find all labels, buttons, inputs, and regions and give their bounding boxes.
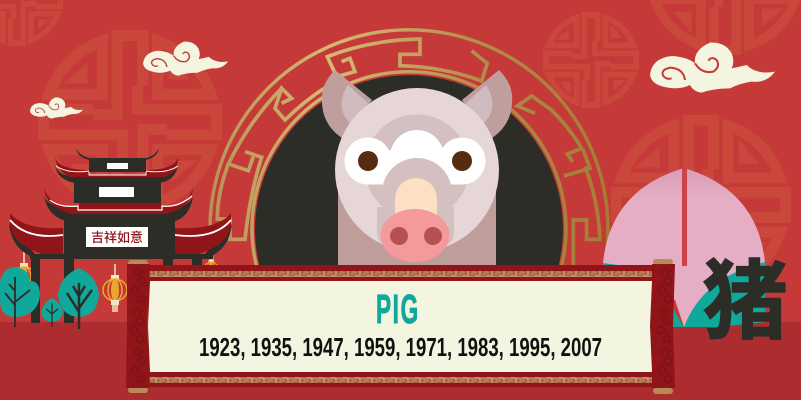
tree large right xyxy=(58,268,99,329)
main gate block xyxy=(30,213,213,259)
pig head xyxy=(335,88,499,252)
tree large left xyxy=(0,267,40,327)
bottom roof xyxy=(9,213,232,258)
scroll title: PIG xyxy=(376,287,420,333)
clouds xyxy=(30,42,775,119)
lanterns xyxy=(12,252,218,312)
floor xyxy=(0,322,801,400)
gate sign: 吉祥如意 xyxy=(91,227,143,246)
umbrella xyxy=(603,168,765,327)
gold circular frame xyxy=(210,30,608,268)
top roof xyxy=(76,148,159,172)
scroll decorative strips xyxy=(149,271,652,383)
pig ears xyxy=(322,70,512,138)
right roller xyxy=(652,259,675,394)
pig nostrils xyxy=(390,227,442,245)
gate posts xyxy=(31,254,202,323)
background medallions xyxy=(0,0,800,290)
upper roof xyxy=(55,158,178,183)
pig xyxy=(322,70,512,270)
zodiac character: 猪 xyxy=(702,231,788,356)
pig snout xyxy=(380,209,450,262)
trees xyxy=(0,267,99,329)
tree small xyxy=(41,298,63,327)
pig neck xyxy=(338,192,496,270)
pig face xyxy=(364,114,470,220)
pig pupils xyxy=(358,151,472,171)
scroll red band xyxy=(148,265,654,387)
scroll banner xyxy=(126,259,675,394)
scroll years: 1923, 1935, 1947, 1959, 1971, 1983, 1995, 2007 xyxy=(199,332,602,362)
pig muzzle arch xyxy=(382,158,452,228)
scroll cream panel xyxy=(148,281,652,372)
pagoda gate xyxy=(9,148,232,323)
pig eye mask xyxy=(344,130,486,184)
middle roof xyxy=(44,183,193,222)
pig nose bridge xyxy=(395,178,437,225)
left roller xyxy=(126,260,150,393)
